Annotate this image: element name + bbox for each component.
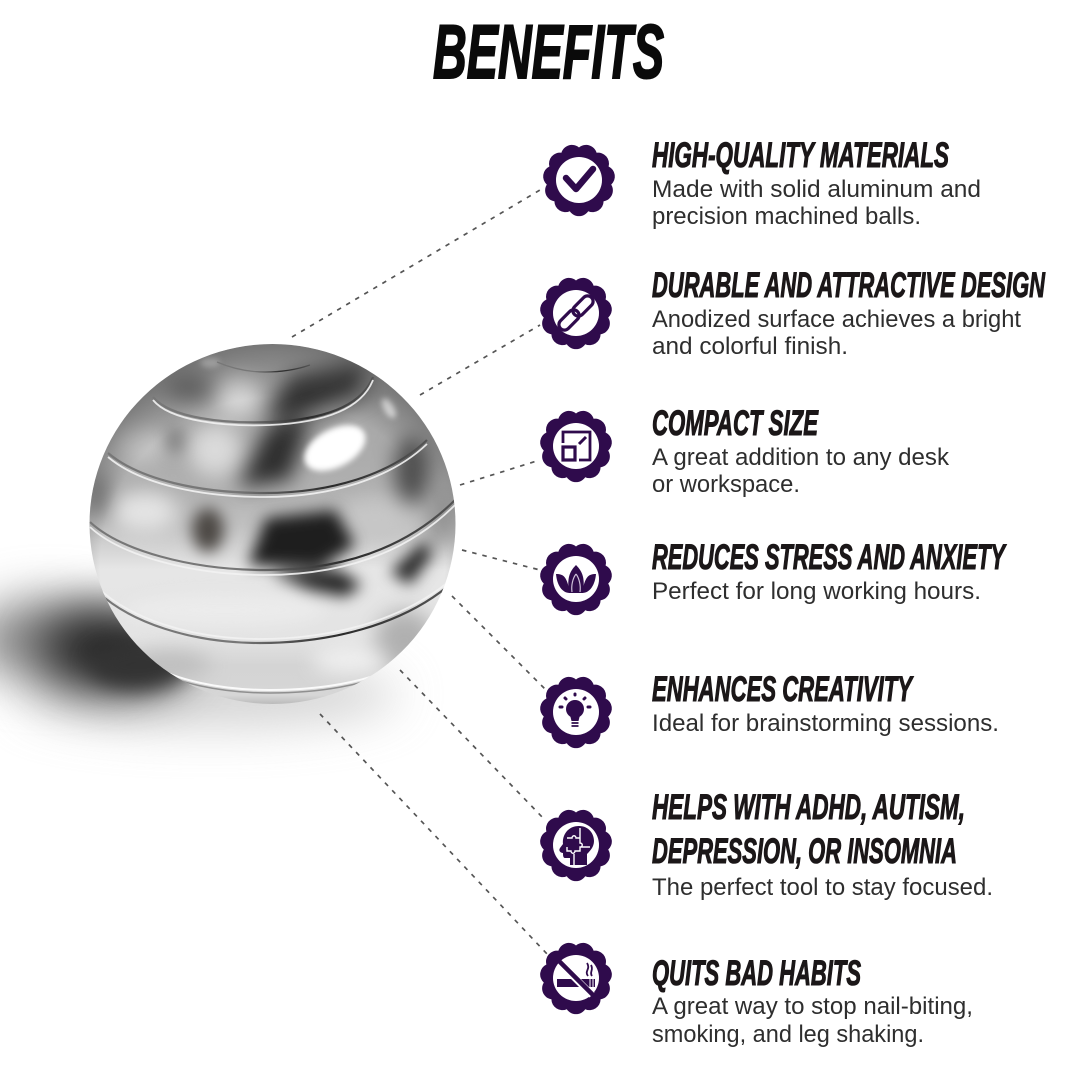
- ball grooves: [90, 362, 455, 693]
- benefit: compact size: [540, 403, 950, 498]
- icon: light bulb badge: [540, 677, 612, 748]
- image: metallic kinetic desk ball: [85, 340, 460, 710]
- benefit: enhances creativity: [540, 669, 999, 748]
- icon: lotus badge: [540, 544, 612, 615]
- description: [652, 993, 973, 1048]
- description: smoking, and leg shaking.: [652, 1021, 924, 1048]
- description: Perfect for long working hours.: [652, 578, 981, 605]
- title: BENEFITS: [433, 10, 664, 95]
- description: [652, 306, 1021, 360]
- icon: check badge: [543, 145, 615, 216]
- heading: ENHANCES CREATIVITY: [652, 669, 914, 709]
- benefit: reduces stress and anxiety: [540, 537, 1007, 615]
- description: Made with solid aluminum and: [652, 176, 981, 203]
- description: and colorful finish.: [652, 333, 848, 360]
- icon: puzzle head badge: [540, 810, 612, 881]
- description: A great addition to any desk: [652, 444, 950, 471]
- heading: [652, 787, 965, 871]
- icon: chain link badge: [540, 278, 612, 349]
- description: precision machined balls.: [652, 203, 921, 230]
- description: Anodized surface achieves a bright: [652, 306, 1021, 333]
- heading: QUITS BAD HABITS: [652, 953, 861, 993]
- heading: COMPACT SIZE: [652, 403, 819, 443]
- description: The perfect tool to stay focused.: [652, 874, 993, 901]
- benefit: quits bad habits: [540, 943, 973, 1048]
- icon: resize badge: [540, 411, 612, 482]
- benefit: durable and attractive design: [540, 265, 1046, 360]
- benefit: helps with ADHD, autism, depression, or insomnia: [540, 787, 993, 901]
- ball shadow: [0, 600, 400, 727]
- benefit: high-quality materials: [543, 135, 981, 230]
- icon: no smoking badge: [540, 943, 612, 1014]
- dashed connector lines: [292, 190, 548, 955]
- description: [652, 176, 981, 230]
- description: A great way to stop nail-biting,: [652, 993, 973, 1020]
- description: or workspace.: [652, 471, 800, 498]
- description: [652, 444, 950, 498]
- description: Ideal for brainstorming sessions.: [652, 710, 999, 737]
